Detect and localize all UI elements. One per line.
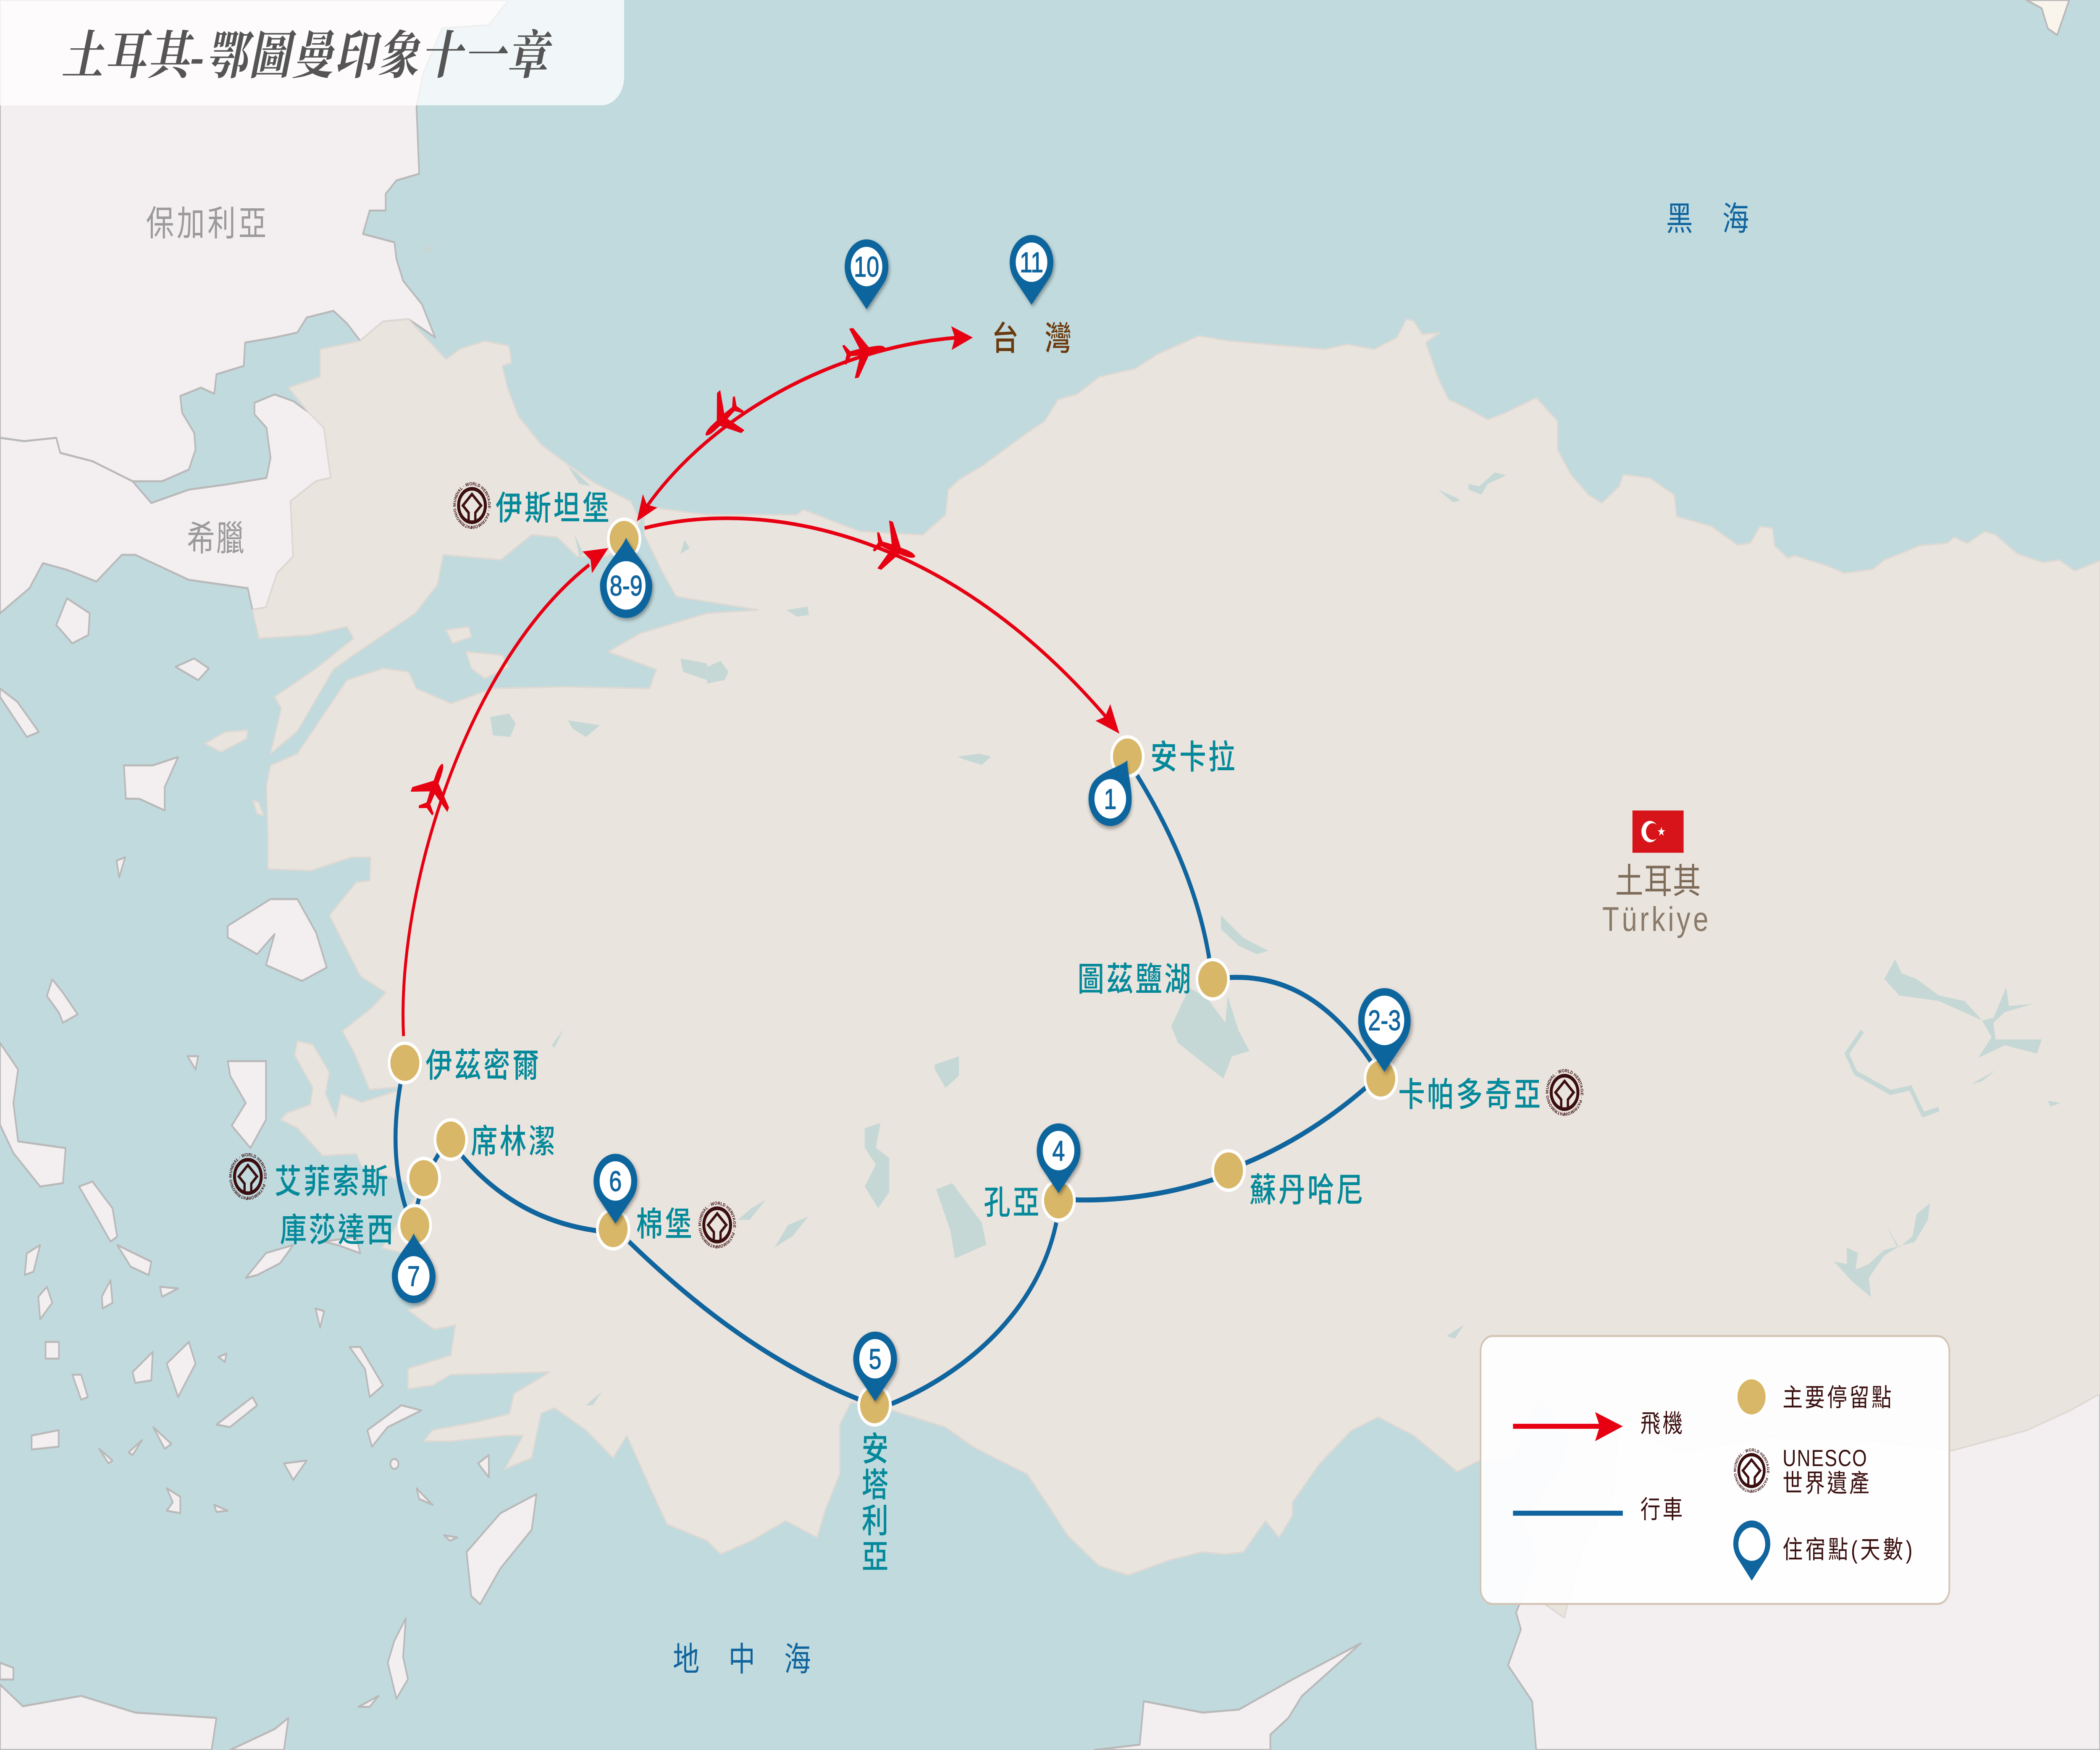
- flight arrowheads: [583, 326, 1119, 734]
- legend: UNESCO text: UNESCO: [1782, 1445, 1868, 1471]
- country labels: 保加利亞: [146, 204, 269, 244]
- country labels: [146, 204, 269, 559]
- foreign land: Crimea: [2026, 0, 2069, 35]
- place labels: 利: [862, 1503, 888, 1540]
- foreign land: Cyprus: [1094, 1643, 1361, 1750]
- legend: stop text: 主要停留點: [1782, 1384, 1894, 1412]
- pin: day 5: [853, 1332, 897, 1401]
- sea label: Mediterranean: 地中海: [673, 1641, 840, 1678]
- Taiwan label: 台灣: [992, 320, 1098, 357]
- plane icons: [407, 323, 921, 822]
- pin: day 10: 10: [854, 251, 879, 283]
- Turkey name label: Türkiye: [1602, 900, 1711, 938]
- foreign land: Bulgaria, Greece and islands: [0, 0, 536, 1750]
- pin: day 6: 6: [609, 1165, 622, 1197]
- legend: stop dot: [1736, 1377, 1767, 1416]
- legend: UNESCO text: 世界遺產: [1782, 1470, 1872, 1498]
- flight routes (red): [403, 338, 1110, 1036]
- foreign land: Syria and the east: [1508, 1387, 2100, 1750]
- pin: day 11: 11: [1020, 247, 1043, 278]
- title panel: [0, 0, 624, 105]
- place labels: 蘇丹哈尼: [1250, 1172, 1365, 1209]
- icon: UNESCO Istanbul: PATRIMONIO MUNDIAL · WORLD HERITAGE · PATRIMOINE MONDIAL: [453, 482, 491, 530]
- driving routes (blue): [396, 775, 1374, 1404]
- place labels: 棉堡: [636, 1206, 694, 1243]
- pin: day 7: [392, 1233, 436, 1303]
- icon: Turkish flag: [1633, 811, 1684, 853]
- place labels: 塔: [862, 1467, 888, 1504]
- legend: flight arrow: [1513, 1412, 1623, 1441]
- legend: drive text: 行車: [1641, 1496, 1685, 1524]
- icon: UNESCO Pamukkale: PATRIMONIO MUNDIAL · WORLD HERITAGE · PATRIMOINE MONDIAL: [698, 1201, 736, 1249]
- place labels: 伊茲密爾: [425, 1047, 541, 1084]
- place labels: [275, 490, 1543, 1576]
- pin: day 2-3: 2-3: [1368, 1005, 1401, 1036]
- pin: day 1: [1081, 747, 1147, 836]
- pin: day 5: 5: [869, 1343, 882, 1375]
- Turkey name label: [1602, 862, 1711, 938]
- legend: UNESCO text: [1782, 1445, 1872, 1498]
- legend: UNESCO icon: PATRIMONIO MUNDIAL · WORLD HERITAGE · PATRIMOINE MONDIAL: [1733, 1447, 1770, 1494]
- panel: legend: [1480, 1336, 1949, 1604]
- pin: day 8-9: [600, 538, 652, 618]
- title: 土耳其-鄂圖曼印象十一章: [62, 28, 552, 85]
- pin: day 1: 1: [1104, 783, 1117, 815]
- place labels: 亞: [862, 1539, 888, 1576]
- legend: lodging pin: [1733, 1521, 1770, 1581]
- legend: lodging text: 住宿點(天數): [1782, 1536, 1915, 1564]
- country labels: 希臘: [187, 519, 246, 559]
- icon: UNESCO Ephesus: PATRIMONIO MUNDIAL · WORLD HERITAGE · PATRIMOINE MONDIAL: [229, 1152, 267, 1200]
- pin: day 4: 4: [1052, 1135, 1065, 1167]
- place labels: 圖茲鹽湖: [1077, 961, 1193, 998]
- pin: day 10: [845, 239, 888, 309]
- lakes and reservoirs: [419, 242, 2061, 1405]
- pin: day 7: 7: [407, 1260, 420, 1292]
- stop markers: [389, 519, 1396, 1425]
- pin: day 6: [593, 1154, 637, 1224]
- Turkey land: [205, 319, 2100, 1618]
- pin: day 2-3: [1358, 988, 1411, 1072]
- pin: day 8-9: 8-9: [610, 570, 643, 601]
- Turkey name label: 土耳其: [1615, 862, 1701, 901]
- place labels: 庫莎達西: [280, 1212, 396, 1249]
- place labels: 伊斯坦堡: [496, 490, 611, 527]
- place labels: 席林潔: [471, 1123, 557, 1160]
- place labels: 安: [862, 1431, 888, 1468]
- pin: day 11: [1010, 235, 1053, 305]
- place labels: 艾菲索斯: [275, 1164, 390, 1201]
- place labels: 卡帕多奇亞: [1398, 1077, 1543, 1114]
- place labels: 孔亞: [984, 1184, 1042, 1222]
- sea label: Black Sea: 黑海: [1666, 201, 1779, 238]
- place labels: 安卡拉: [1150, 739, 1237, 776]
- legend: flight text: 飛機: [1641, 1410, 1685, 1438]
- pin: day 4: [1037, 1123, 1080, 1193]
- icon: UNESCO Cappadocia: PATRIMONIO MUNDIAL · WORLD HERITAGE · PATRIMOINE MONDIAL: [1545, 1068, 1584, 1116]
- legend: drive line: [1513, 1511, 1623, 1516]
